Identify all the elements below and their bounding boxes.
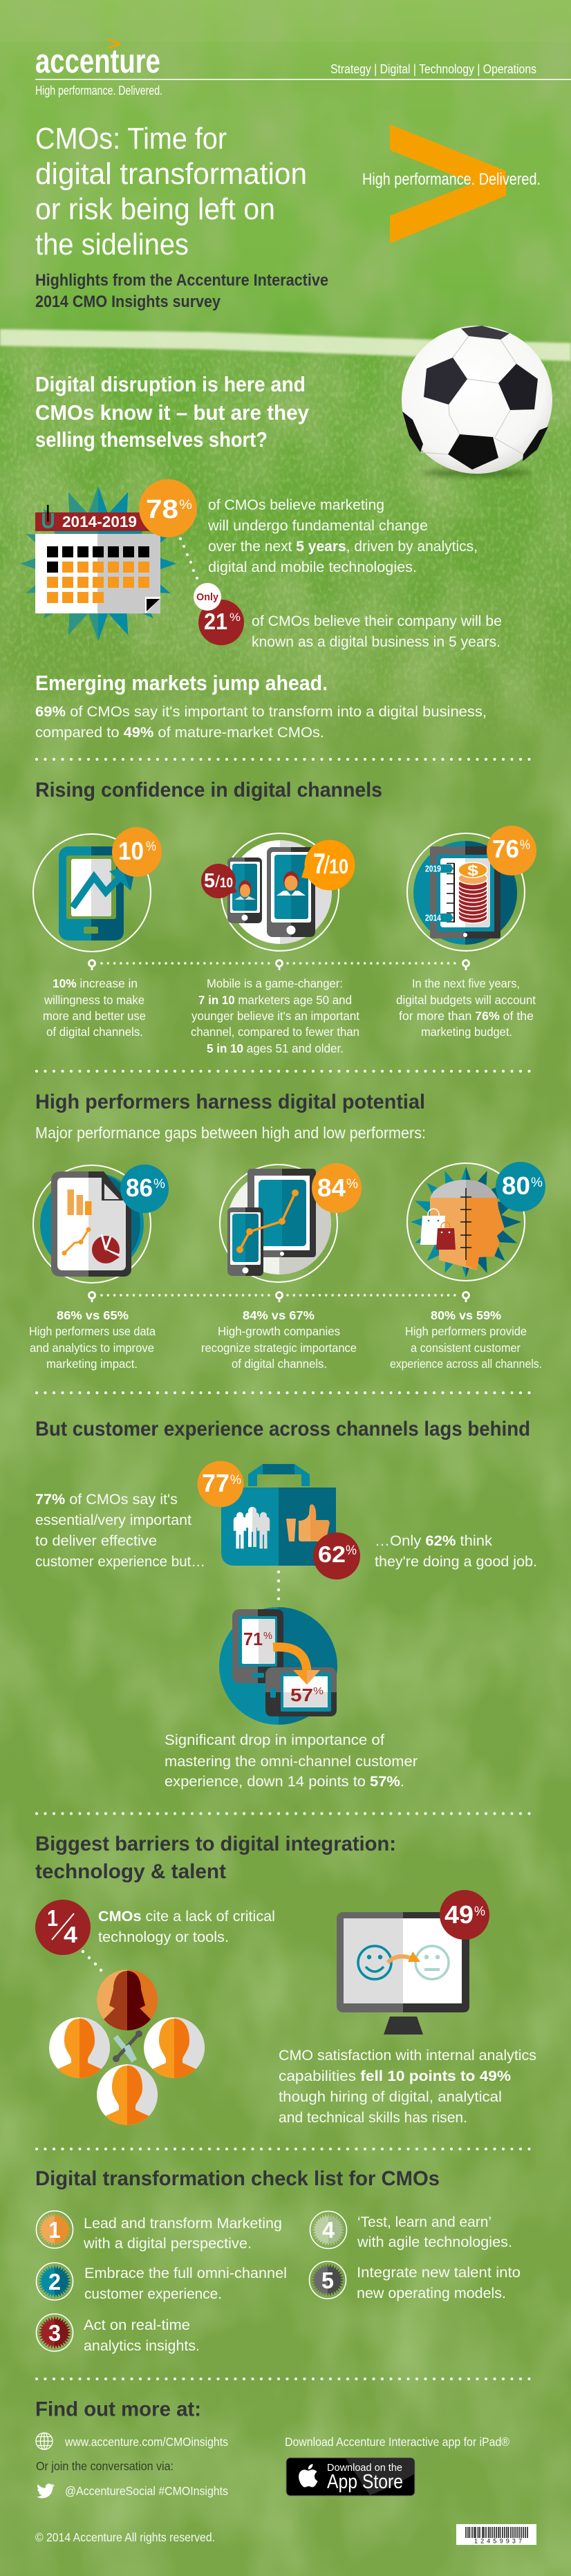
tablet: %: [313, 1685, 324, 1697]
stat bubble: 5/10: 10: [220, 875, 233, 891]
caption: 80% vs 59%: a consistent customer: [411, 1341, 521, 1355]
happy face: [358, 1946, 391, 1979]
budget scale: [422, 863, 455, 923]
stat bubble: 80%: %: [531, 1176, 543, 1190]
text: CMOs cite a lack: CMOs cite a lack of critical: [98, 1909, 275, 1925]
connector dots: [82, 1950, 102, 1972]
badge 3: 3: [48, 2320, 61, 2346]
stat bubble: 5/10: 5: [204, 870, 215, 892]
stat bubble: 77%: [198, 1461, 243, 1508]
stat bubble: 7/10: 10: [329, 855, 348, 878]
icon: shopping bag with people and thumbs up: [221, 1464, 336, 1566]
stat bubble: 84%: 84: [317, 1174, 346, 1202]
tablet: [247, 1169, 316, 1257]
heading: rising confidence: Rising confidence in digital channels: [35, 779, 382, 801]
caption: 10% increase: of digital channels.: [46, 1025, 143, 1039]
text: 77% of CMOs: essential/very important: [35, 1512, 191, 1528]
text: join the conversation: Or join the conversation via:: [36, 2459, 174, 2473]
check list item 2: customer experience.: [84, 2286, 222, 2302]
text: CMO satisfaction: [279, 2048, 536, 2126]
stat bubble: 76%: 76: [492, 835, 519, 863]
left person: [49, 2017, 110, 2078]
stat bubble: 84%: %: [346, 1177, 358, 1192]
stat bubble: 10%: [112, 827, 162, 877]
logo tagline: High performance. Delivered.: [35, 84, 162, 98]
heading: biggest barriers: Biggest barriers to digital integration:: [35, 1833, 396, 1855]
stat bubble: one quarter: [35, 1900, 91, 1955]
logo wordmark: accenture: [35, 43, 160, 80]
title: or risk being left on: [35, 192, 275, 226]
text: significant drop: [165, 1732, 418, 1790]
calendar starburst: [20, 486, 176, 641]
stat bubble: 49%: %: [474, 1905, 485, 1919]
caption: 84% vs 67%: High-growth companies: [218, 1324, 340, 1338]
copyright: © 2014 Accenture All rights reserved.: [35, 2530, 215, 2544]
heading: customer experience: But customer experience across channels lags behind: [35, 1418, 530, 1440]
caption: mobile game-changer: 7 in 10 marketers age 50 and: [198, 993, 352, 1007]
text: 77% of CMOs: to deliver effective: [35, 1533, 157, 1549]
check list item 1: with a digital perspective.: [83, 2236, 252, 2252]
icon: talent group with tools: [49, 1970, 205, 2125]
barcode: [456, 2524, 536, 2545]
icon: tablet with coin stack: $: [467, 863, 478, 879]
title: the sidelines: [35, 228, 189, 261]
text: CMOs cite a lack: [98, 1909, 275, 1945]
check list item 4: with agile technologies.: [357, 2234, 512, 2250]
check list item 3: analytics insights.: [84, 2338, 200, 2354]
thumbs up: [286, 1504, 330, 1541]
phone: %: [263, 1630, 272, 1642]
check list item 5: Integrate new talent into: [357, 2265, 521, 2281]
heading: check list: Digital transformation check list for CMOs: [35, 2167, 440, 2190]
caption: mobile game-changer: channel, compared to fewer than: [191, 1025, 359, 1039]
bar chart: [68, 1189, 91, 1215]
heading: biggest barriers: [35, 1833, 396, 1883]
title: digital transformation: [35, 157, 307, 191]
phone: [232, 1609, 283, 1683]
text: only 62%: [375, 1533, 537, 1570]
text: 78% of CMOs: over the next 5 years, driven by analytics,: [208, 539, 478, 555]
connector dots: [179, 537, 198, 580]
text: 77% of CMOs: [35, 1492, 205, 1570]
caption: 10% increase: 10% increase in: [53, 976, 138, 990]
stat bubble: only 21%: 21: [204, 609, 227, 634]
stat bubble: 86%: [120, 1165, 169, 1213]
caption: 86% vs 65%: High performers use data: [29, 1324, 156, 1338]
check list item 4: ‘Test, learn and earn’: [357, 2214, 492, 2230]
caption: mobile game-changer: 5 in 10 ages 51 and older.: [207, 1041, 344, 1055]
connector dots: [277, 1570, 280, 1600]
icon: monitor with satisfaction faces: [337, 1912, 469, 2035]
twitter handle with bird icon: @AccentureSocial #CMOInsights: [65, 2484, 228, 2498]
stat bubble: 62%: [313, 1532, 360, 1579]
caption: 86% vs 65%: marketing impact.: [46, 1357, 138, 1371]
icon: calendar 2014-2019: [20, 486, 176, 641]
stat bubble: 10%: %: [146, 840, 156, 854]
icon: tablet and phone with growth line: [220, 1165, 337, 1282]
badge 4: [309, 2211, 348, 2249]
caption: digital budgets: [396, 976, 536, 1039]
heading: digital disruption: Digital disruption is here and: [35, 372, 306, 396]
stat bubble: 86%: %: [153, 1177, 165, 1192]
stat bubble: 7/10: 7: [313, 847, 326, 880]
caption: 10% increase: more and better use: [43, 1009, 146, 1023]
App Store badge: Download on the: [327, 2462, 402, 2474]
caption: digital budgets: digital budgets will account: [396, 993, 536, 1007]
stat bubble: 7/10: [301, 840, 355, 891]
caption: 86% vs 65%: [29, 1308, 156, 1371]
icon: smartphone with rising chart: [33, 834, 151, 952]
caption: mobile game-changer: younger believe it's an important: [191, 1009, 359, 1023]
navigation strip: Strategy | Digital | Technology | Operations: [330, 62, 536, 76]
shopping bags: [420, 1209, 456, 1250]
stat bubble: 80%: 80: [502, 1171, 530, 1200]
text: 77% of CMOs: customer experience but…: [35, 1554, 205, 1570]
badge 5: [308, 2261, 347, 2299]
heading: digital disruption: selling themselves short?: [35, 427, 268, 452]
text: 77% of CMOs: 77% of CMOs say it's: [35, 1492, 178, 1508]
stat bubble: 77%: 77: [202, 1469, 230, 1497]
badge 4: 4: [322, 2217, 335, 2243]
text: 78% of CMOs: of CMOs believe marketing: [208, 497, 384, 513]
tablet: 57: [290, 1685, 313, 1705]
connector pins row: [88, 960, 469, 970]
heading: digital disruption: [35, 372, 310, 452]
App Store badge: [286, 2458, 415, 2496]
caption: 84% vs 67%: recognize strategic importance: [201, 1341, 357, 1355]
heading: biggest barriers: technology & talent: [35, 1860, 226, 1883]
caption: 86% vs 65%: 86% vs 65%: [57, 1308, 129, 1322]
arrow: [273, 1647, 320, 1685]
heading: high performers: High performers harness digital potential: [35, 1091, 425, 1113]
website link with globe icon: www.accenture.com/CMOinsights: [64, 2435, 228, 2449]
stat bubble: one quarter: 1: [47, 1905, 58, 1931]
badge 2: [35, 2262, 74, 2301]
title: [35, 122, 307, 261]
arrow: [388, 1952, 420, 1963]
budget scale: 2014: [425, 913, 442, 923]
stat bubble: 86%: 86: [126, 1174, 153, 1202]
top person: [97, 1970, 158, 2030]
icon: twitter bird: [37, 2483, 55, 2498]
text: CMO satisfaction: CMO satisfaction with internal analytics: [279, 2048, 536, 2064]
text: only 62%: …Only 62% think: [375, 1533, 493, 1549]
check list item 2: [35, 2262, 287, 2302]
caption: 10% increase: [43, 976, 146, 1039]
neutral face: [415, 1946, 449, 1979]
badge 1: [35, 2210, 74, 2249]
website link with globe icon: [36, 2433, 228, 2449]
caption: 80% vs 59%: 80% vs 59%: [431, 1308, 501, 1322]
tablet: [265, 1667, 337, 1716]
stat bubble: only 21%: Only: [196, 591, 219, 603]
subtitle: [35, 271, 328, 311]
stat bubble: 62%: 62: [318, 1541, 346, 1567]
text: download app: Download Accenture Interactive app for iPad®: [285, 2435, 509, 2449]
emerging markets section: Emerging markets jump ahead.: [35, 671, 328, 695]
icon: phone 71% to tablet 57%: [219, 1607, 337, 1725]
text: 78% of CMOs: digital and mobile technologies.: [208, 559, 417, 575]
stat bubble: 80%: [496, 1162, 545, 1212]
stat bubble: 5/10: /: [215, 873, 220, 891]
caption: 80% vs 59%: High performers provide: [405, 1324, 527, 1338]
caption: 86% vs 65%: and analytics to improve: [30, 1341, 154, 1355]
text: 21% of CMOs: of CMOs believe their company will be: [252, 613, 502, 629]
icon: customer head with shopping bags: [407, 1163, 525, 1281]
text: significant drop: mastering the omni-channel customer: [165, 1754, 418, 1770]
bag handle: [248, 1464, 310, 1486]
text: CMO satisfaction: capabilities fell 10 points to 49%: [279, 2068, 511, 2084]
badge 2: 2: [48, 2269, 61, 2295]
stat bubble: 7/10: /: [324, 851, 330, 879]
icon: soccer ball: [402, 326, 552, 477]
budget scale: 2019: [425, 863, 441, 874]
large phone: [267, 847, 315, 937]
stat bubble: 77%: %: [230, 1473, 241, 1488]
stat bubble: 10%: 10: [118, 837, 144, 865]
text: 21% of CMOs: [252, 613, 502, 650]
check list item 3: [35, 2313, 200, 2354]
text: CMO satisfaction: and technical skills has risen.: [279, 2110, 467, 2126]
badge 1: 1: [48, 2217, 61, 2243]
heading: find out more: Find out more at:: [35, 2398, 201, 2420]
subheading: performance gaps: Major performance gaps between high and low performers:: [35, 1124, 426, 1142]
emerging markets section: [35, 671, 487, 741]
caption: digital budgets: In the next five years,: [412, 976, 520, 990]
phone: [227, 1207, 263, 1276]
small phone: [227, 858, 262, 923]
icon: analytics document: [33, 1165, 151, 1283]
caption: mobile game-changer: Mobile is a game-changer:: [207, 976, 343, 990]
text: significant drop: Significant drop in importance of: [165, 1732, 384, 1748]
emerging markets section: compared to 49% of mature-market CMOs.: [35, 725, 324, 741]
stat bubble: only 21%: [194, 583, 244, 645]
icon: apple: [299, 2464, 317, 2487]
icon: wrench and screwdriver: [113, 2030, 142, 2062]
caption: digital budgets: for more than 76% of the: [399, 1009, 534, 1023]
barcode: 12459937: [474, 2538, 522, 2545]
stat bubble: 76%: [487, 826, 536, 875]
coin stack: [458, 862, 487, 923]
icon: tablet with coin stack: [407, 833, 525, 951]
stat bubble: only 21%: %: [230, 611, 241, 624]
check list item 1: [35, 2210, 282, 2252]
stat bubble: 49%: 49: [444, 1900, 474, 1929]
stat bubble: 84%: [312, 1163, 362, 1213]
text: 21% of CMOs: known as a digital business in 5 years.: [252, 634, 500, 650]
stat bubble: 62%: %: [346, 1544, 357, 1558]
caption: digital budgets: marketing budget.: [421, 1025, 512, 1039]
check list item 1: Lead and transform Marketing: [84, 2216, 282, 2232]
text: 78% of CMOs: will undergo fundamental change: [207, 518, 428, 534]
text: significant drop: experience, down 14 points to 57%.: [165, 1774, 404, 1790]
check list item 5: new operating models.: [357, 2286, 506, 2301]
header: Accenture logo and navigation: [35, 38, 571, 98]
text: 78% of CMOs: [207, 497, 478, 575]
heading: digital disruption: CMOs know it – but are they: [35, 400, 310, 425]
emerging markets section: 69% of CMOs say it's important to transform into a digital business,: [35, 704, 487, 720]
check list item 2: Embrace the full omni-channel: [84, 2265, 287, 2281]
big orange chevron with tagline: [362, 124, 541, 243]
text: only 62%: they're doing a good job.: [375, 1554, 537, 1570]
people silhouettes: [234, 1507, 270, 1548]
text: CMOs cite a lack: technology or tools.: [98, 1929, 229, 1945]
caption: 84% vs 67%: [201, 1308, 357, 1371]
pie chart: [92, 1234, 120, 1263]
stat bubble: one quarter: 4: [64, 1922, 78, 1947]
phone: 71: [243, 1629, 263, 1649]
icon: calendar 2014-2019: 2014-2019: [62, 513, 137, 530]
icon: globe: [36, 2433, 53, 2449]
title: CMOs: Time for: [35, 122, 227, 156]
growth line: [236, 1189, 299, 1253]
caption: 84% vs 67%: 84% vs 67%: [243, 1308, 315, 1322]
icon: two phones with marketers: [221, 833, 339, 951]
App Store badge: App Store: [327, 2471, 403, 2493]
connector pins row: [88, 1292, 469, 1302]
right person: [144, 2017, 205, 2078]
stat bubble: 78%: 78: [146, 495, 178, 524]
check list item 3: Act on real-time: [84, 2317, 190, 2333]
line chart: [62, 1227, 91, 1256]
caption: 80% vs 59%: [390, 1308, 542, 1371]
bottom person: [97, 2064, 158, 2125]
stat bubble: 5/10: [201, 864, 237, 898]
caption: 10% increase: willingness to make: [44, 993, 144, 1007]
subtitle: 2014 CMO Insights survey: [35, 293, 221, 311]
subtitle: Highlights from the Accenture Interactive: [35, 271, 328, 290]
stat bubble: 76%: %: [520, 838, 530, 853]
stat bubble: 78%: [139, 479, 197, 537]
badge 3: [35, 2313, 74, 2352]
stat bubble: 78%: %: [179, 498, 192, 512]
text: CMO satisfaction: though hiring of digital, analytical: [279, 2089, 502, 2105]
badge 5: 5: [321, 2268, 334, 2293]
caption: 84% vs 67%: of digital channels.: [232, 1357, 327, 1371]
caption: 80% vs 59%: experience across all channels.: [390, 1357, 542, 1371]
check list item 4: [309, 2211, 512, 2250]
check list item 5: [308, 2261, 521, 2301]
caption: mobile game-changer: [191, 976, 359, 1055]
logo chevron: [108, 38, 120, 49]
stat bubble: 49%: [440, 1890, 489, 1940]
